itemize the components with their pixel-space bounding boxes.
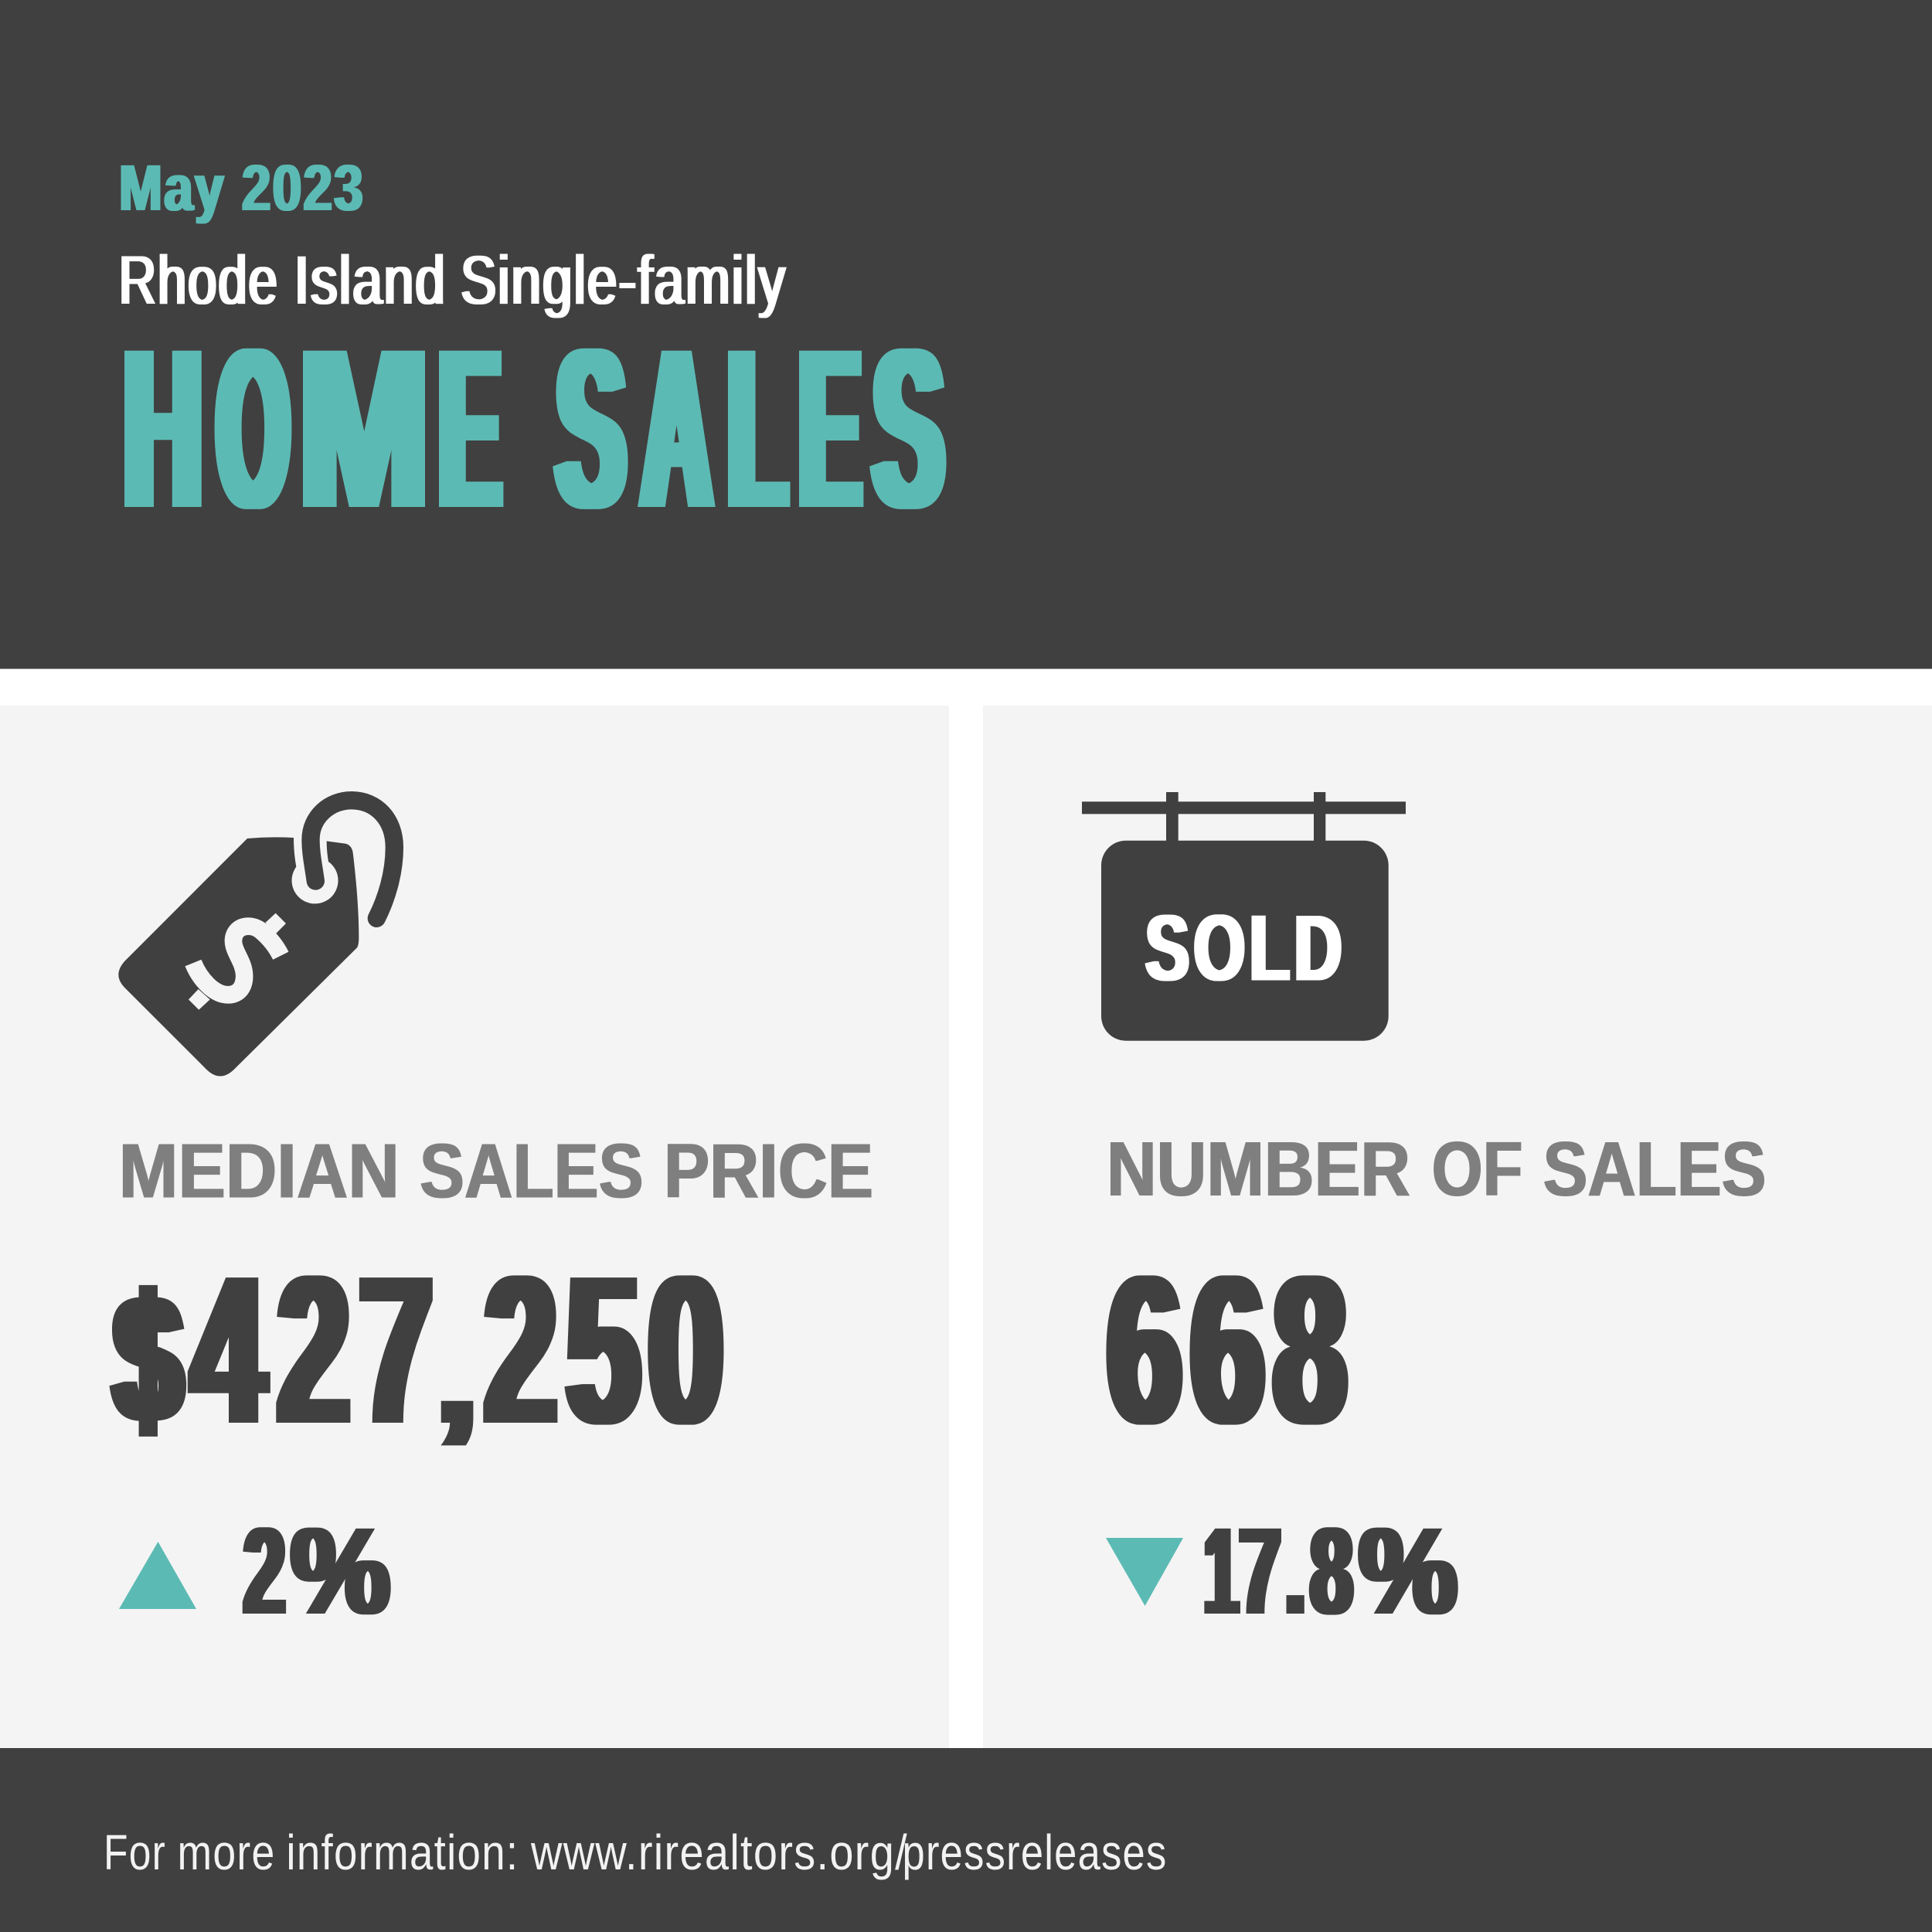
panel: number of sales bbox=[983, 706, 1932, 1748]
title: M bbox=[300, 302, 428, 556]
change: number of sales: . bbox=[1285, 1502, 1305, 1640]
change: median price: 2 bbox=[243, 1502, 285, 1640]
icon: price tag bbox=[118, 801, 394, 1076]
title: O bbox=[218, 302, 288, 556]
value: median price: 5 bbox=[566, 1232, 640, 1468]
label: number of sales: NUMBER bbox=[1107, 1126, 1410, 1213]
value: median price: 7 bbox=[360, 1232, 432, 1468]
subtitle: Single-family bbox=[461, 241, 787, 318]
title: H bbox=[124, 302, 202, 556]
date label: May 2023 bbox=[119, 151, 365, 224]
value: median price: $ bbox=[114, 1255, 182, 1462]
title: S bbox=[556, 302, 625, 556]
subtitle: Island bbox=[294, 241, 447, 318]
footer text: pressreleases bbox=[903, 1825, 1167, 1880]
value: median price: 2 bbox=[278, 1232, 349, 1468]
footer text: For bbox=[104, 1825, 166, 1880]
change: number of sales: 7 bbox=[1240, 1502, 1281, 1640]
value: median price: 2 bbox=[485, 1232, 556, 1468]
footer text: more bbox=[178, 1825, 275, 1880]
footer text: information: bbox=[286, 1825, 519, 1880]
change: number of sales: 8 bbox=[1311, 1502, 1352, 1640]
icon: up arrow triangle bbox=[119, 1542, 196, 1609]
footer band bbox=[0, 1748, 1932, 1932]
sign text: SOLD bbox=[1145, 895, 1346, 1000]
subtitle: Rhode bbox=[119, 241, 279, 318]
value: median price: 4 bbox=[192, 1232, 266, 1468]
header band: S bbox=[873, 302, 944, 556]
icon: sold sign bbox=[1082, 792, 1406, 1041]
header band bbox=[0, 0, 1932, 669]
label: number of sales: OF bbox=[1432, 1126, 1522, 1213]
label: median sales price: MEDIAN bbox=[119, 1128, 400, 1215]
value: median price: 0 bbox=[648, 1232, 723, 1468]
change: number of sales: 1 bbox=[1204, 1502, 1238, 1640]
change: number of sales: % bbox=[1359, 1502, 1458, 1640]
title: L bbox=[729, 302, 786, 556]
value: median price: , bbox=[437, 1291, 477, 1454]
panel: median sales price bbox=[0, 706, 949, 1748]
value: number of sales: 6 bbox=[1107, 1232, 1182, 1468]
value: number of sales: 6 bbox=[1191, 1232, 1264, 1468]
label: median sales price: SALES bbox=[420, 1128, 643, 1215]
title: A bbox=[642, 302, 711, 556]
change: median price: % bbox=[291, 1502, 389, 1640]
icon: down arrow triangle bbox=[1106, 1538, 1183, 1606]
label: number of sales: SALES bbox=[1543, 1126, 1766, 1213]
title: E bbox=[800, 302, 860, 556]
title: E bbox=[440, 302, 500, 556]
value: number of sales: 8 bbox=[1274, 1232, 1346, 1468]
footer text: www.rirealtors.org/ bbox=[530, 1825, 908, 1880]
label: median sales price: PRICE bbox=[664, 1128, 873, 1215]
